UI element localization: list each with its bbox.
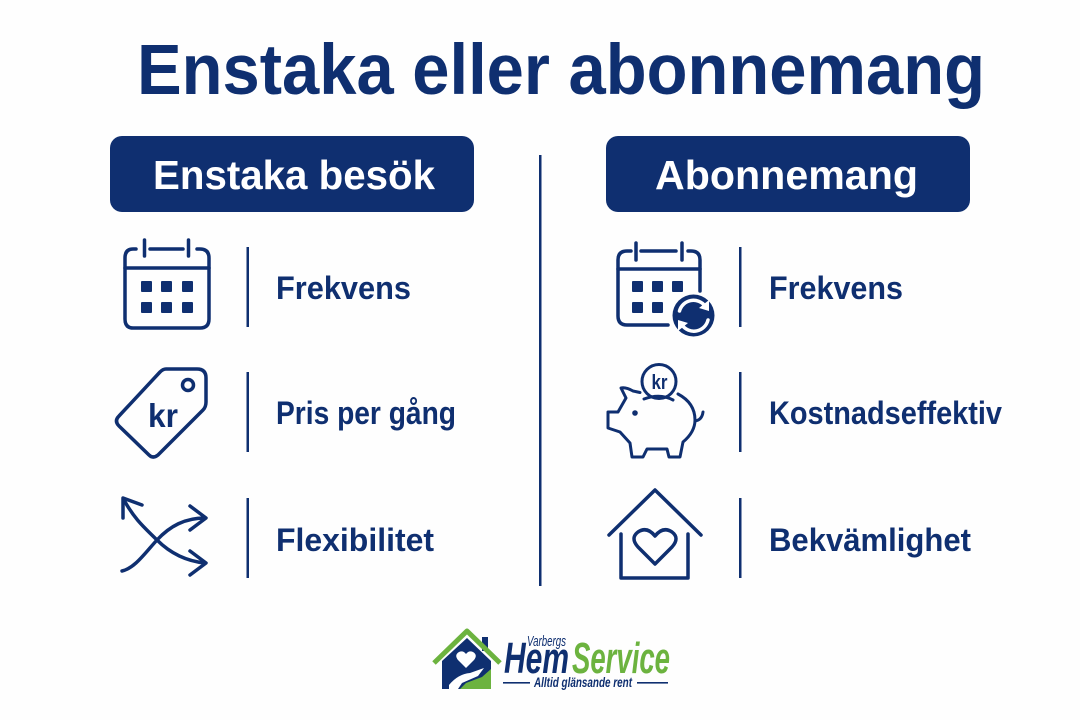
heading: abonnemang bbox=[606, 136, 970, 212]
panel: abonnemang bbox=[606, 136, 1002, 578]
label: kostnadseffektiv: Kostnadseffektiv bbox=[769, 395, 1002, 431]
row divider bbox=[739, 498, 742, 578]
label: pris per gång: Pris per gång bbox=[276, 395, 456, 431]
icon: piggy bank: kr bbox=[652, 372, 668, 394]
logo house icon bbox=[434, 631, 500, 689]
icon: crossing arrows bbox=[122, 498, 206, 575]
label: frekvens: Frekvens bbox=[276, 270, 411, 306]
logo text: Service: Service bbox=[572, 634, 670, 683]
row divider bbox=[246, 498, 249, 578]
logo text: Hem: Hem bbox=[504, 634, 569, 683]
center divider bbox=[539, 155, 542, 586]
logo tagline: Alltid glänsande rent bbox=[533, 674, 633, 690]
row divider bbox=[739, 372, 742, 452]
logo: Varbergs HemService bbox=[434, 631, 670, 690]
icon: recurring calendar bbox=[618, 243, 714, 336]
icon: price tag: kr bbox=[148, 397, 178, 434]
row divider bbox=[246, 372, 249, 452]
icon: calendar bbox=[125, 240, 209, 328]
title: Enstaka eller abonnemang bbox=[137, 31, 985, 110]
icon: piggy bank bbox=[608, 364, 703, 457]
heading: abonnemang: Abonnemang bbox=[655, 152, 918, 198]
panel: enstaka besök bbox=[110, 136, 474, 578]
label: bekvämlighet: Bekvämlighet bbox=[769, 522, 971, 558]
icon: house with heart bbox=[609, 490, 701, 578]
heading: enstaka besök bbox=[110, 136, 474, 212]
icon: price tag bbox=[116, 369, 206, 457]
label: flexibilitet: Flexibilitet bbox=[276, 522, 434, 558]
label: frekvens: Frekvens bbox=[769, 270, 903, 306]
logo text: Varbergs: Varbergs bbox=[527, 633, 566, 650]
row divider bbox=[739, 247, 742, 327]
heading: enstaka besök: Enstaka besök bbox=[153, 152, 435, 198]
row divider bbox=[246, 247, 249, 327]
